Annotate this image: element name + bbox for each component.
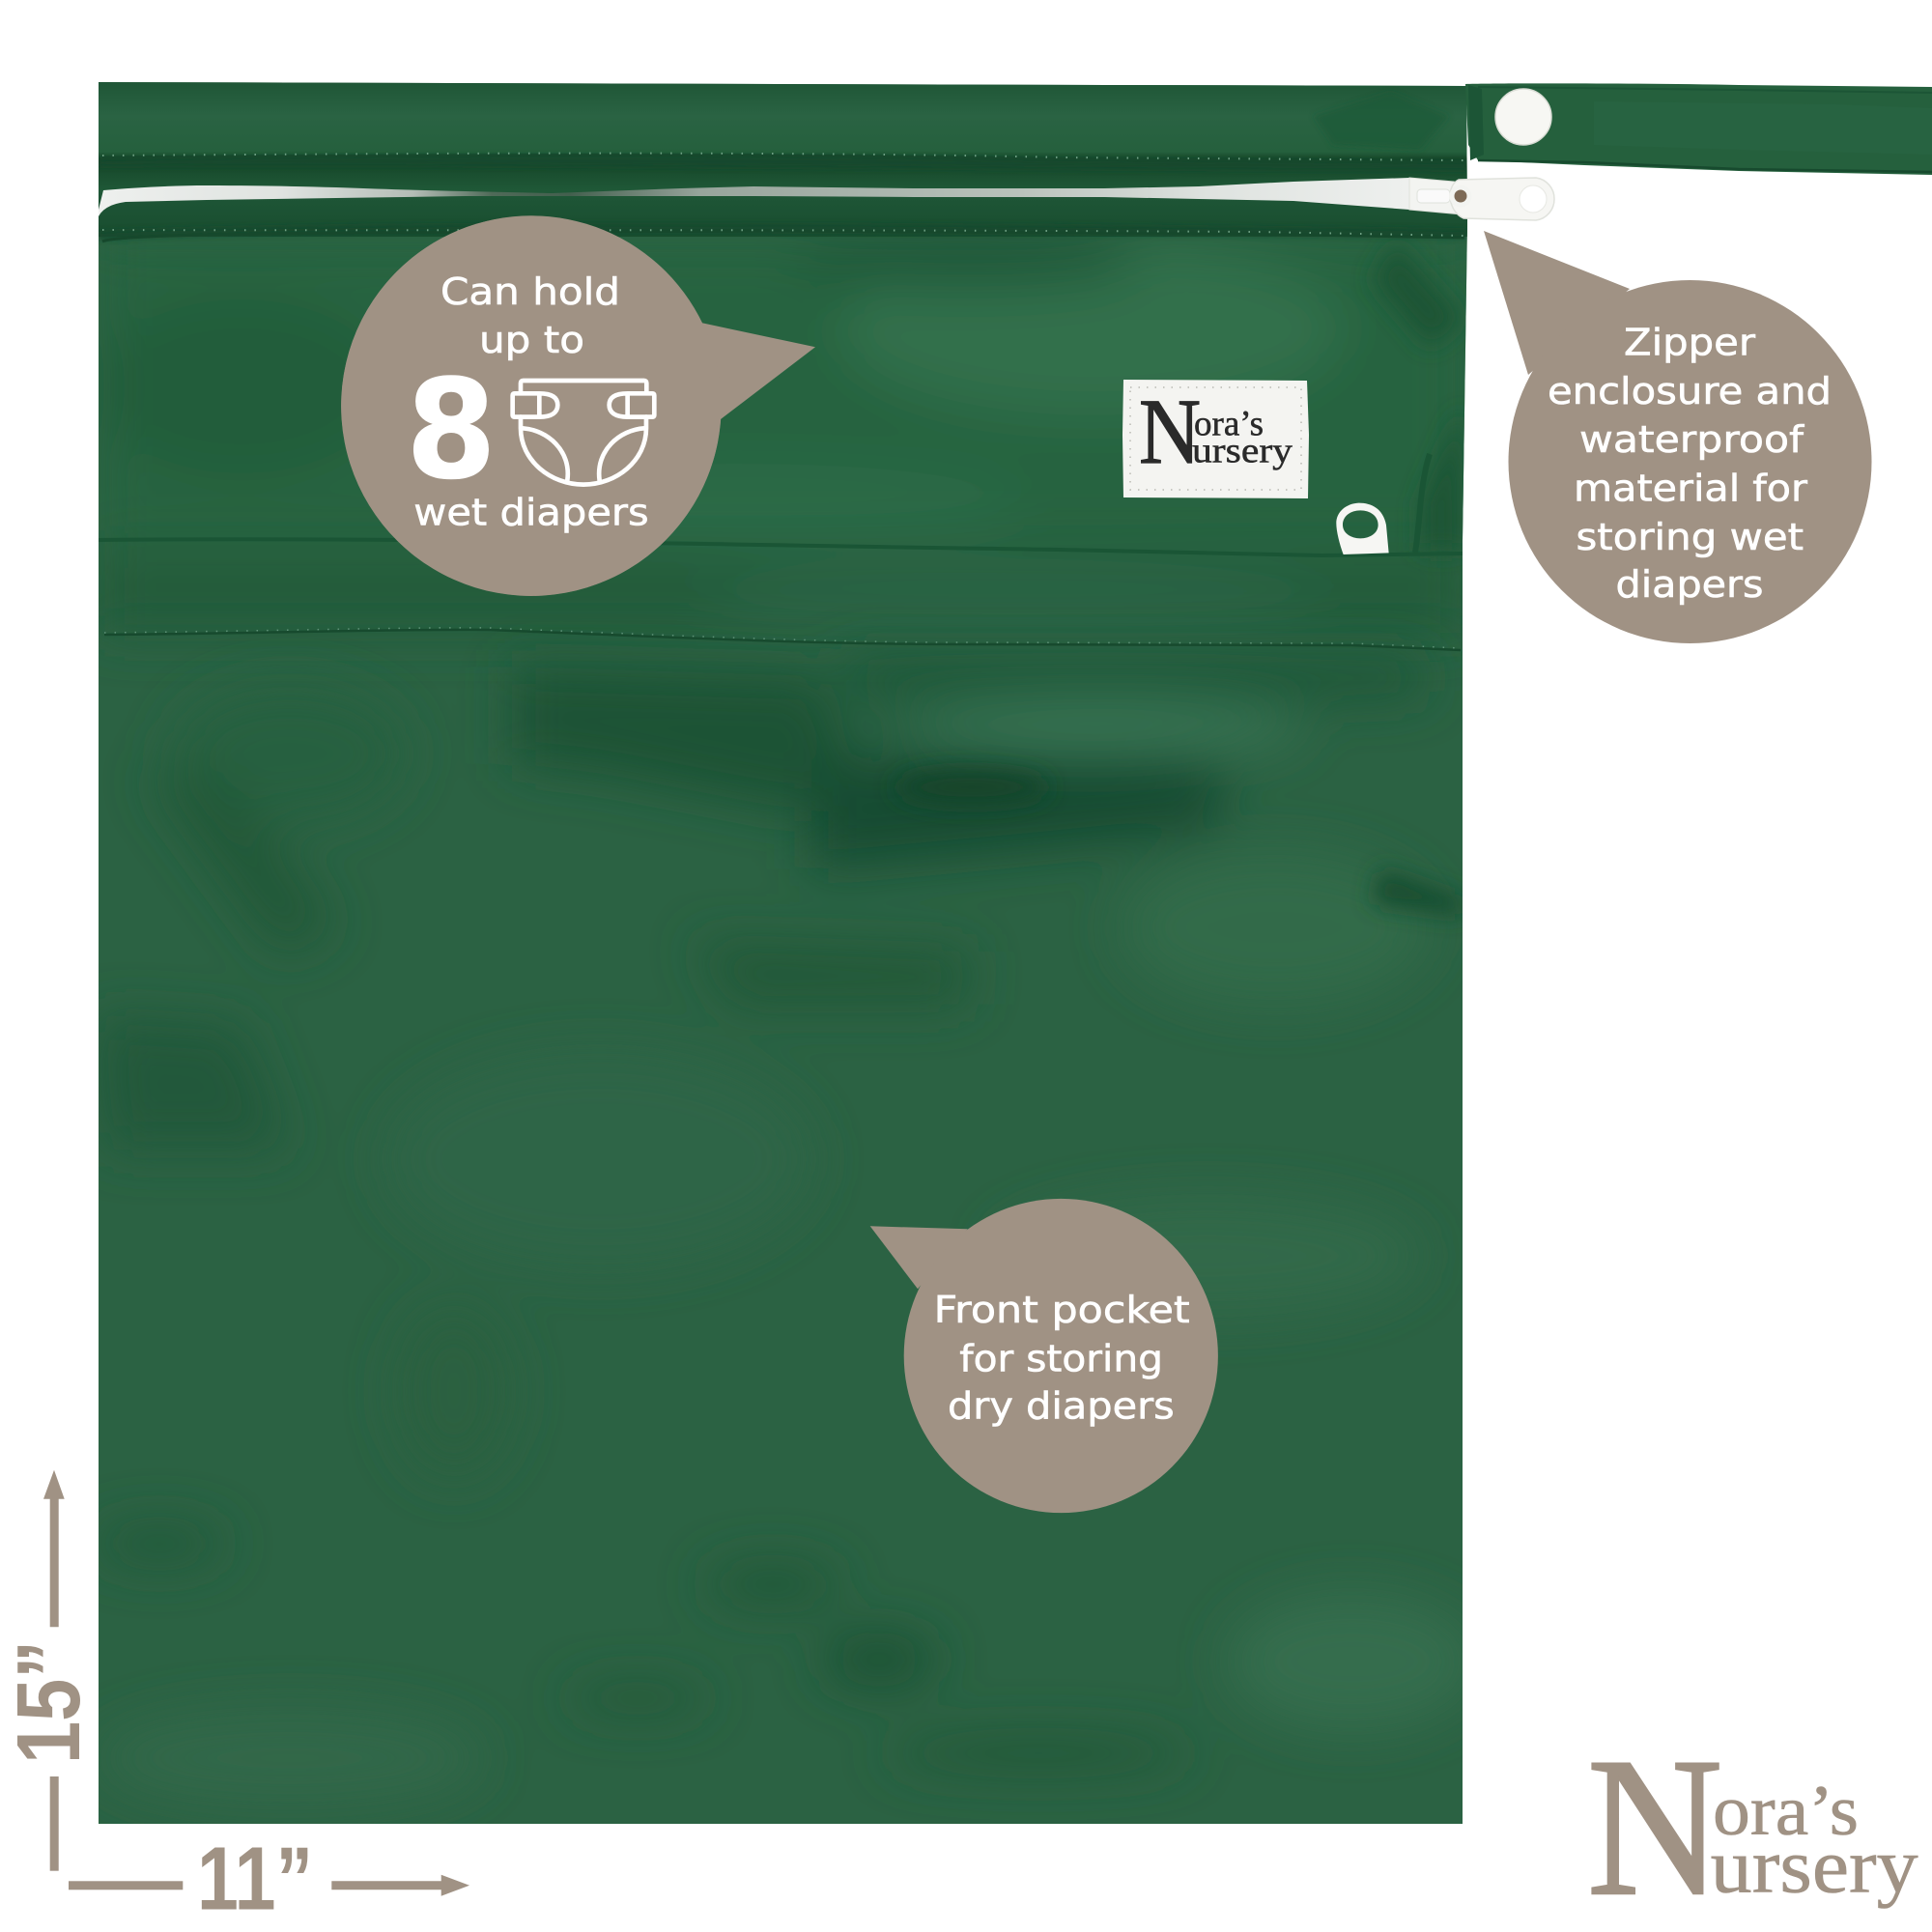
arrow: height up	[43, 1470, 65, 1627]
callout: front pocket: Front pocket	[934, 1289, 1190, 1331]
callout: zipper enclosure: waterproof	[1579, 418, 1805, 461]
lower body shading folds	[104, 654, 1454, 1714]
dimension: height 15 inches	[0, 1470, 99, 1871]
panel: green wet bag	[92, 77, 1478, 1826]
dimension: width 11 inches	[69, 1829, 469, 1929]
sewn label: N	[1139, 380, 1201, 483]
front pocket zipper pull tab	[1336, 503, 1389, 554]
sewn label	[1122, 380, 1309, 498]
callout: zipper enclosure: material for	[1574, 468, 1807, 510]
strap with snap	[1465, 83, 1932, 175]
upper compartment shading	[97, 236, 1468, 633]
callout: front pocket	[870, 1199, 1218, 1513]
callout: front pocket: for storing	[959, 1337, 1163, 1379]
zipper tape	[99, 178, 1409, 216]
arrow: width right	[331, 1875, 469, 1896]
logo: Nora's Nursery: ursery	[1711, 1824, 1918, 1909]
callout: zipper enclosure	[1484, 231, 1872, 643]
capacity text: up to: up to	[479, 319, 584, 361]
callout: zipper enclosure: diapers	[1615, 563, 1764, 606]
top band above and below the zipper	[97, 82, 1468, 237]
logo: Nora's Nursery: N	[1587, 1718, 1722, 1932]
pocket fold edge	[99, 539, 1463, 555]
logo: Nora's Nursery: ora’s	[1713, 1772, 1859, 1851]
dimension: width 11 inches: 11”	[197, 1829, 313, 1929]
capacity number 8: 8	[406, 351, 497, 510]
dimension: height 15 inches: 15”	[0, 1640, 99, 1764]
callout: front pocket: dry diapers	[948, 1385, 1175, 1428]
callout: zipper enclosure: storing wet	[1577, 516, 1804, 558]
capacity text: can hold: Can hold	[440, 270, 620, 313]
callout: zipper enclosure: Zipper	[1624, 322, 1755, 364]
capacity text: wet diapers: wet diapers	[413, 491, 649, 533]
callout: capacity	[341, 215, 815, 596]
icon: snap button	[1495, 89, 1551, 145]
logo: Nora's Nursery	[1587, 1718, 1918, 1932]
sewn label: ursery	[1192, 431, 1293, 470]
seams	[102, 154, 1466, 650]
callout: zipper enclosure: enclosure and	[1548, 370, 1832, 412]
zipper slider and pull	[1409, 178, 1554, 220]
icon: diaper	[513, 381, 654, 485]
sewn label: ora’s	[1194, 405, 1264, 444]
